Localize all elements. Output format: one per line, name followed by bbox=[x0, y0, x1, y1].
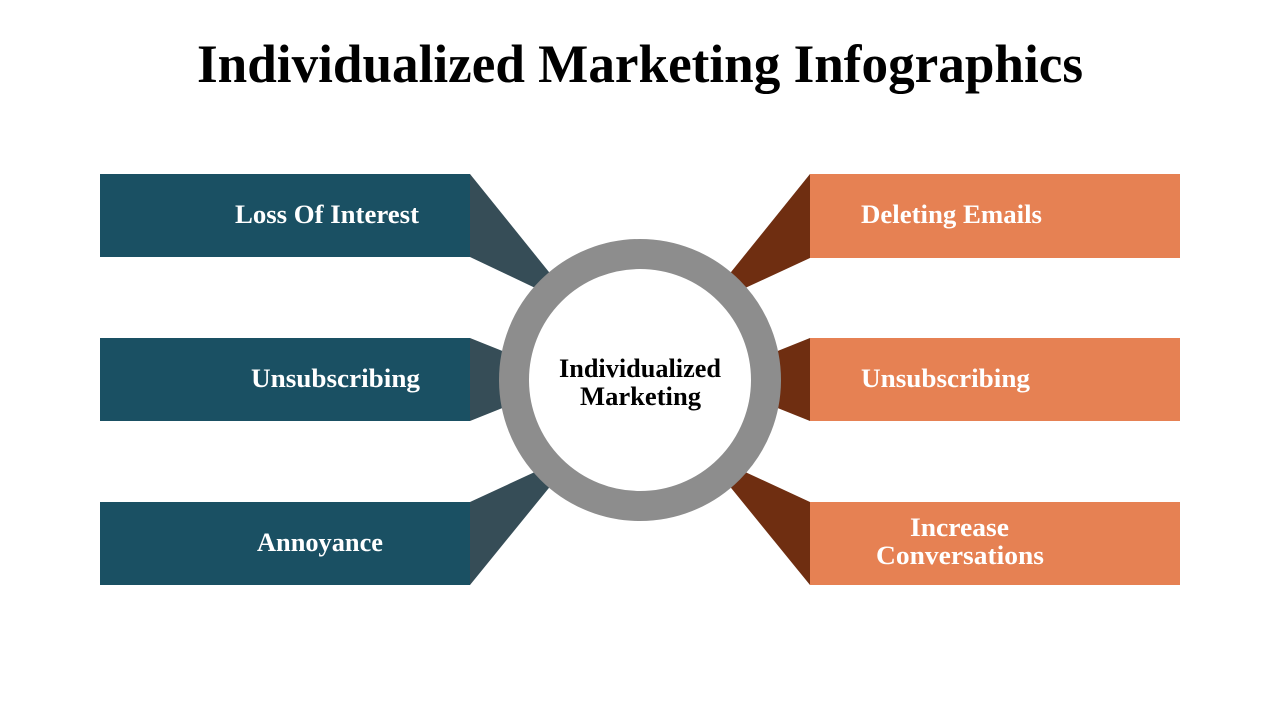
connector: deleting emails bbox=[723, 174, 810, 295]
label: unsubscribing left: Unsubscribing bbox=[251, 364, 420, 393]
panel: annoyance bbox=[100, 465, 557, 585]
panel: increase conversations bbox=[723, 465, 1180, 585]
bar: unsubscribing left bbox=[100, 338, 470, 421]
bar: loss of interest bbox=[100, 174, 470, 257]
connector: unsubscribing right bbox=[760, 338, 810, 421]
connector: unsubscribing left bbox=[470, 338, 520, 421]
panel: unsubscribing left bbox=[100, 338, 520, 421]
connector: increase conversations bbox=[723, 465, 810, 585]
center label: Marketing bbox=[580, 382, 701, 411]
bar: annoyance bbox=[100, 502, 470, 585]
label: deleting emails: Deleting Emails bbox=[861, 200, 1042, 229]
panel: unsubscribing right bbox=[760, 338, 1180, 421]
bar: unsubscribing right bbox=[810, 338, 1180, 421]
panel: loss of interest bbox=[100, 174, 557, 295]
title: Individualized Marketing Infographics bbox=[197, 34, 1083, 94]
label: increase conversations: Conversations bbox=[876, 541, 1044, 570]
panel: deleting emails bbox=[723, 174, 1180, 295]
label: loss of interest: Loss Of Interest bbox=[235, 200, 419, 229]
bar: increase conversations bbox=[810, 502, 1180, 585]
center label: Individualized bbox=[559, 354, 722, 383]
connector: loss of interest bbox=[470, 174, 557, 295]
center ring bbox=[514, 254, 766, 506]
bar: deleting emails bbox=[810, 174, 1180, 258]
label: annoyance: Annoyance bbox=[257, 528, 383, 557]
connector: annoyance bbox=[470, 465, 557, 585]
label: increase conversations: Increase bbox=[910, 513, 1009, 542]
label: unsubscribing right: Unsubscribing bbox=[861, 364, 1030, 393]
